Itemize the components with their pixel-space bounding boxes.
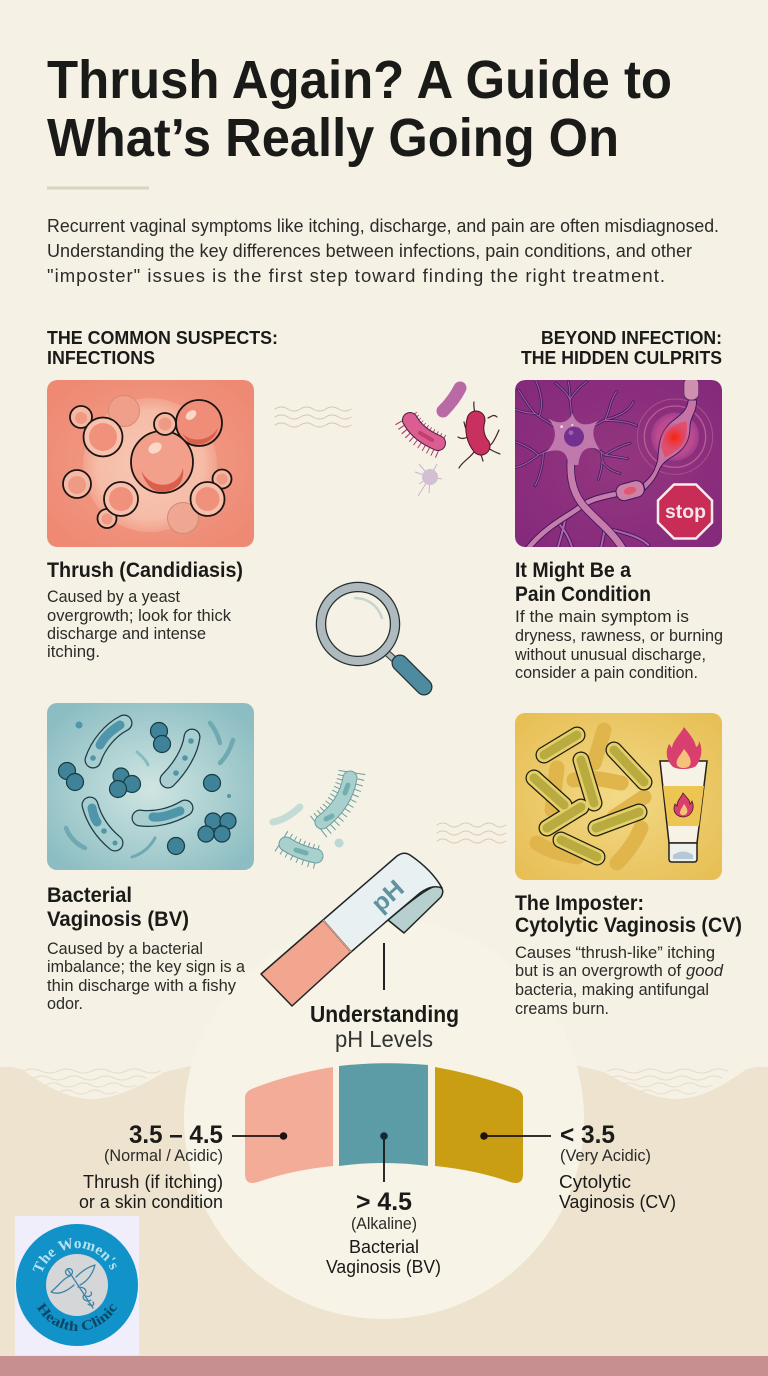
heading: understanding pH levels: pH Levels — [335, 1026, 433, 1052]
left column heading — [47, 328, 278, 368]
label: very acidic pH: Cytolytic — [559, 1171, 631, 1192]
label: pain condition: It Might Be a — [515, 559, 631, 582]
icon: stop sign — [658, 484, 712, 538]
decorative waves: upper left — [275, 407, 351, 427]
logo: The Women's Health Clinic — [15, 1216, 139, 1355]
label: pain condition — [514, 559, 723, 682]
label: alkaline pH: Bacterial — [349, 1236, 419, 1257]
label: thrush: Caused by a yeast — [47, 587, 180, 606]
segment: very acidic — [435, 1067, 523, 1183]
label: cytolytic vaginosis: Causes “thrush-like” itching — [515, 943, 715, 962]
label: very acidic pH: Vaginosis (CV) — [559, 1191, 676, 1212]
illustration: bacteria — [47, 703, 254, 870]
connector: very acidic — [480, 1132, 551, 1140]
label: normal pH: or a skin condition — [79, 1191, 223, 1212]
footer bar — [0, 1356, 768, 1376]
segment: normal — [245, 1067, 333, 1183]
label: bacterial vaginosis: Caused by a bacterial — [47, 939, 203, 958]
heading: understanding pH levels — [310, 1001, 459, 1052]
label: normal pH — [79, 1121, 223, 1212]
label: normal pH: 3.5 – 4.5 — [129, 1121, 223, 1149]
label: pain condition: consider a pain condition. — [515, 663, 698, 682]
left column heading: INFECTIONS — [47, 348, 155, 368]
label: cytolytic vaginosis: but is an overgrowth of — [515, 961, 681, 980]
illustration: yeast cells — [47, 380, 254, 547]
icon: floating teal bacteria — [273, 772, 352, 858]
right column heading: BEYOND INFECTION: — [541, 328, 722, 348]
label: pain condition: dryness, rawness, or burning — [515, 626, 723, 645]
logo: The Women's Health Clinic: Health Clinic — [36, 1302, 117, 1332]
connector: alkaline — [380, 1132, 388, 1182]
panel: pain condition — [514, 377, 723, 682]
panel: thrush — [47, 380, 254, 661]
icon: caduceus — [51, 1265, 95, 1308]
label: cytolytic vaginosis — [515, 892, 742, 1018]
label: pain condition: If the main symptom is — [515, 607, 689, 626]
icon: pH test strip — [261, 853, 443, 1006]
intro paragraph: Recurrent vaginal symptoms like itching, discharge, and pain are often misdiagnosed. — [47, 215, 719, 236]
label: alkaline pH: (Alkaline) — [351, 1215, 417, 1233]
label: thrush — [47, 559, 243, 661]
label: alkaline pH — [326, 1188, 441, 1277]
label: pain condition: Pain Condition — [515, 583, 651, 606]
label: bacterial vaginosis — [47, 884, 246, 1013]
label: cytolytic vaginosis: creams burn. — [515, 999, 609, 1018]
label: normal pH: (Normal / Acidic) — [104, 1147, 223, 1165]
label: bacterial vaginosis: imbalance; the key sign is a — [47, 957, 246, 976]
intro paragraph — [47, 215, 719, 286]
label: thrush: itching. — [47, 642, 100, 661]
label: thrush: discharge and intense — [47, 624, 206, 643]
title — [47, 50, 672, 168]
label: cytolytic vaginosis: bacteria, making antifungal — [515, 980, 709, 999]
right column heading: THE HIDDEN CULPRITS — [521, 348, 722, 368]
icon: floating bacteria cluster — [406, 388, 500, 496]
icon: stop sign: stop — [665, 502, 706, 523]
label: cytolytic vaginosis: Cytolytic Vaginosis (CV) — [515, 914, 742, 937]
connector: normal — [232, 1132, 287, 1140]
label: alkaline pH: > 4.5 — [356, 1188, 412, 1216]
label: thrush: Thrush (Candidiasis) — [47, 559, 243, 582]
label: bacterial vaginosis: Vaginosis (BV) — [47, 908, 189, 931]
label: pain condition: without unusual discharge, — [514, 645, 706, 664]
intro paragraph: Understanding the key differences between infections, pain conditions, and other — [47, 240, 692, 261]
label: bacterial vaginosis: Bacterial — [47, 884, 132, 907]
heading: understanding pH levels: Understanding — [310, 1001, 459, 1027]
label: cytolytic vaginosis: The Imposter: — [515, 892, 644, 915]
label: very acidic pH — [559, 1121, 676, 1212]
illustration: lactobacilli and burning cream tube — [515, 713, 722, 880]
label: alkaline pH: Vaginosis (BV) — [326, 1256, 441, 1277]
icon: magnifying glass — [321, 587, 424, 687]
label: normal pH: Thrush (if itching) — [83, 1171, 223, 1192]
label: bacterial vaginosis: thin discharge with a fishy — [47, 976, 236, 995]
left column heading: THE COMMON SUSPECTS: — [47, 328, 278, 348]
label: very acidic pH: (Very Acidic) — [560, 1147, 651, 1165]
intro paragraph: "imposter" issues is the first step toward finding the right treatment. — [47, 265, 665, 286]
title: Thrush Again? A Guide to — [47, 50, 672, 110]
icon: cream tube with flame — [660, 727, 707, 862]
segment: alkaline — [339, 1063, 428, 1166]
panel: bacterial vaginosis — [47, 703, 254, 1013]
label: bacterial vaginosis: odor. — [47, 994, 83, 1013]
bottom beige band with wave cut-outs — [0, 919, 768, 1356]
label: cytolytic vaginosis: good — [686, 961, 724, 980]
right column heading — [521, 328, 722, 368]
panel: cytolytic vaginosis — [515, 713, 742, 1018]
icon: pH test strip: pH — [366, 875, 410, 918]
label: very acidic pH: < 3.5 — [560, 1121, 615, 1149]
decorative waves: right — [437, 823, 506, 843]
label: thrush: overgrowth; look for thick — [47, 606, 231, 625]
illustration: neuron and stop sign — [515, 377, 722, 548]
title: What’s Really Going On — [47, 108, 619, 168]
logo: The Women's Health Clinic: The Women's — [32, 1238, 117, 1272]
chart: pH scale — [232, 1063, 551, 1183]
